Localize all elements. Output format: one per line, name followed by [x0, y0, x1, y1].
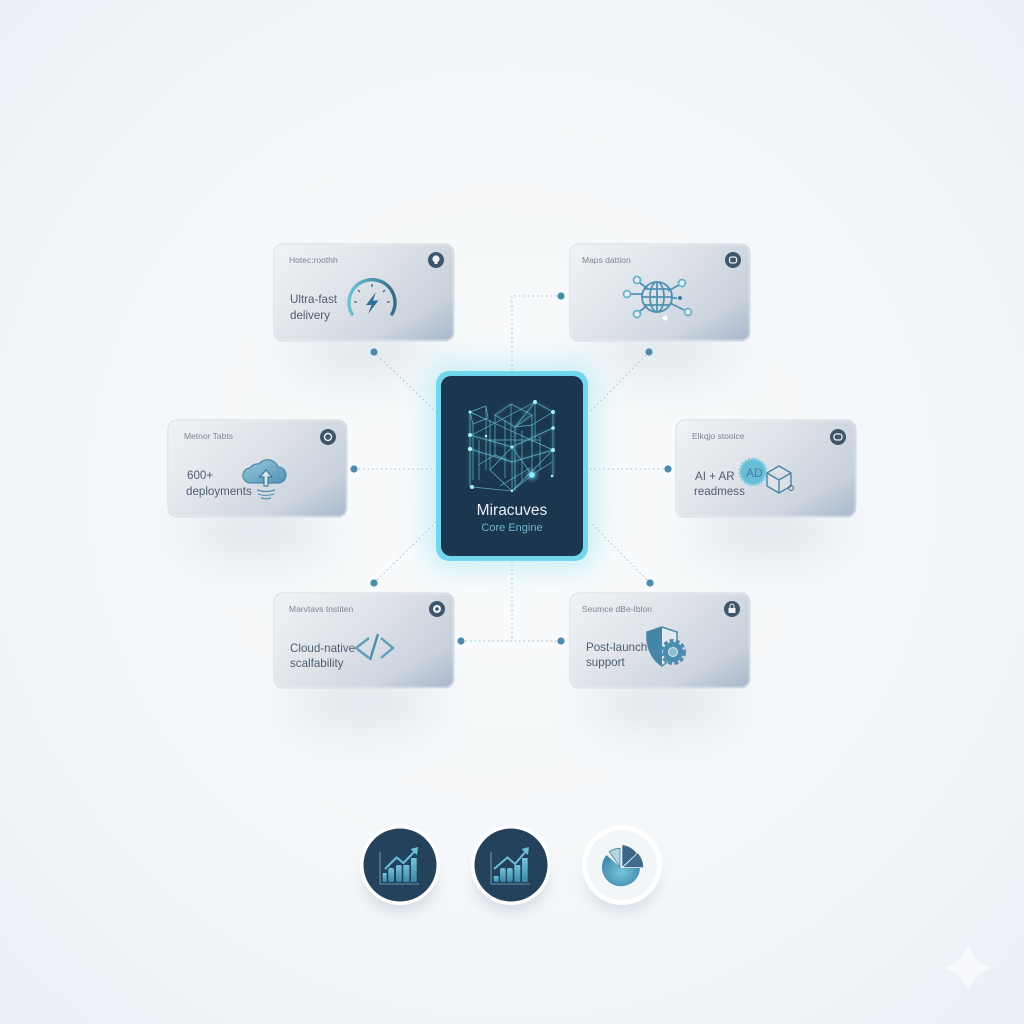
card: cloud-native scalability [274, 593, 454, 688]
card: AI + AR readiness: readmess [694, 485, 745, 498]
icon: network globe [624, 276, 692, 320]
badge [725, 252, 741, 268]
badge [429, 601, 445, 617]
icon: speed gauge [349, 280, 395, 314]
icon: code brackets [356, 634, 393, 660]
card: cloud-native scalability: Marvtavs tnstiten [289, 604, 354, 614]
card: ultra-fast delivery: delivery [290, 309, 330, 322]
card: cloud-native scalability: scalfability [290, 657, 344, 670]
card: AI + AR readiness: AI + AR [695, 470, 735, 483]
icon: isometric wireframe [468, 400, 555, 492]
badge [724, 601, 740, 617]
card: deployments: deployments [186, 485, 252, 498]
card: ultra-fast delivery: Ultra-fast [290, 293, 338, 306]
badge [428, 252, 444, 268]
card: AI + AR readiness [676, 420, 856, 517]
title: Miracuves [477, 502, 548, 519]
panel: Miracuves Core Engine [436, 371, 588, 561]
card: deployments: Metnor Tabts [184, 431, 233, 441]
card: post-launch support: Post-launch [586, 641, 647, 654]
badge [830, 429, 846, 445]
card: deployments [168, 420, 347, 517]
connectors [354, 296, 668, 641]
card: post-launch support: Seumce dBe-Iblon [582, 604, 652, 614]
icon: shield and gear [647, 627, 684, 666]
card: deployments: 600+ [187, 469, 213, 482]
card: ultra-fast delivery: Hotec:roothh [289, 255, 338, 265]
metric button: growth chart 2 [471, 825, 551, 912]
icon: AI badge and cube [740, 459, 794, 493]
card: cloud-native scalability: Cloud-native [290, 642, 355, 655]
metric button: growth chart 1 [360, 825, 440, 912]
subtitle: Core Engine [481, 522, 543, 534]
card: post-launch support [570, 593, 750, 688]
icon: AI badge and cube: AD [746, 466, 763, 480]
card: AI + AR readiness: Elkqjo stoolce [692, 431, 745, 441]
card: maps: Maps dattion [582, 255, 631, 265]
card drop shadows [186, 326, 838, 730]
sparkle watermark [944, 944, 992, 992]
center glow [428, 363, 596, 569]
card: ultra-fast delivery [274, 244, 454, 341]
connector dots [350, 292, 672, 645]
icon: cloud upload [243, 460, 286, 499]
card: post-launch support: support [586, 656, 625, 669]
badge [320, 429, 336, 445]
metric button: pie chart [582, 825, 662, 912]
card: maps [570, 244, 750, 341]
